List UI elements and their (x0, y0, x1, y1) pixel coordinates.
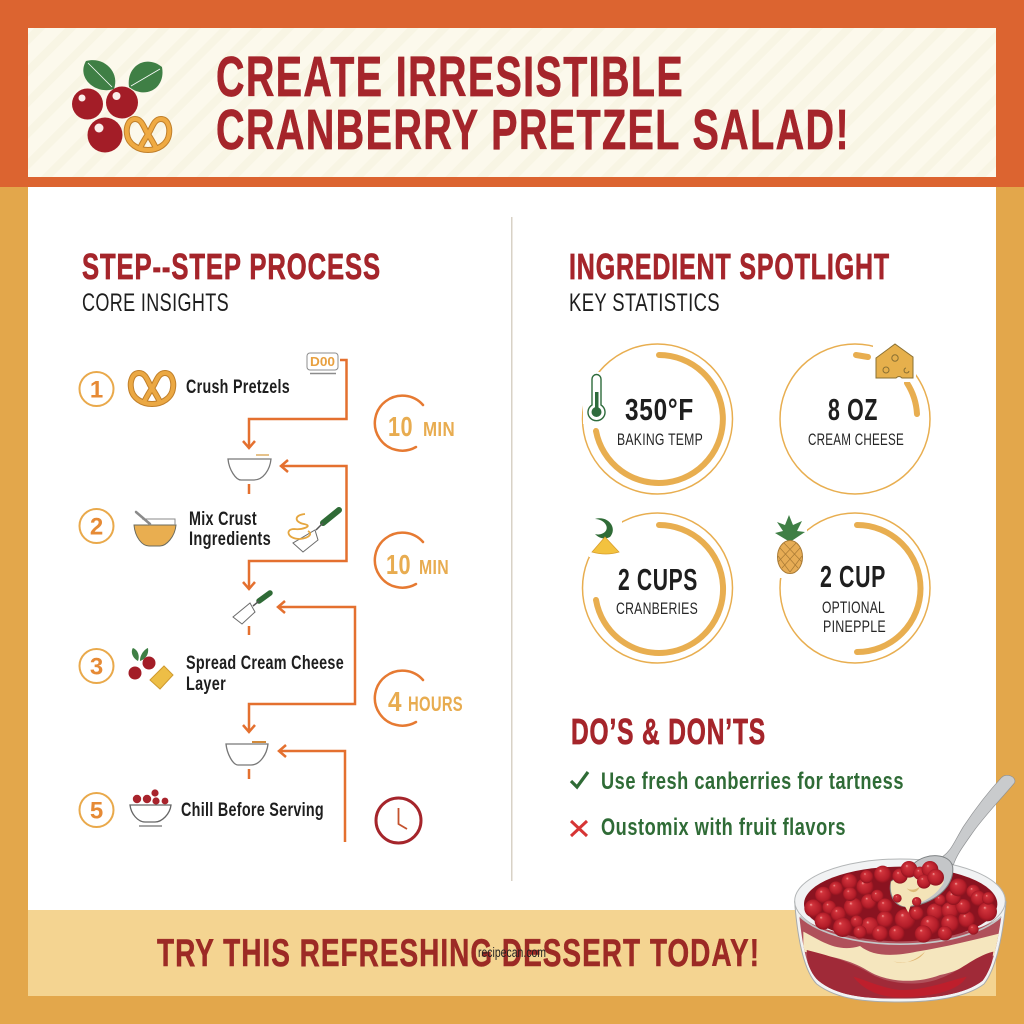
icon: clock (376, 798, 421, 843)
timer: 10 min (375, 396, 455, 451)
heading: ingredient spotlight: KEY STATISTICS (569, 289, 720, 317)
watermark: recipecan.com (478, 945, 546, 960)
step 3: spread cream cheese layer: Layer (186, 674, 226, 695)
heading: step process: CORE INSIGHTS (82, 289, 229, 317)
icon: mixing bowl (226, 742, 268, 765)
timer: 10 min (375, 533, 449, 588)
panel: step-by-step process (80, 246, 463, 843)
icon: thermometer (583, 372, 609, 424)
stat: cream cheese (780, 342, 930, 494)
stat: baking temp (582, 344, 732, 494)
icon: check mark (571, 772, 588, 787)
stat: cranberries (582, 513, 732, 663)
icon: digital timer: D00 (310, 354, 335, 369)
icon: spatula with cream (288, 510, 339, 552)
timer: 10 min: MIN (419, 557, 449, 579)
title (216, 45, 850, 162)
icon: cheese wedge (873, 342, 916, 382)
step 3: spread cream cheese layer: Spread Cream Cheese (186, 653, 344, 674)
stat: cranberries: CRANBERIES (616, 600, 698, 618)
step 5: chill before serving: Chill Before Serving (181, 800, 324, 821)
illustration: cranberry dessert bowl with spoon (793, 775, 1015, 1003)
stat: cream cheese: CREAM CHEESE (808, 431, 904, 449)
timer: 4 hours: HOURS (408, 693, 463, 716)
icon: spatula (233, 593, 270, 624)
icon: cranberries and pretzel logo (72, 60, 169, 152)
icon: pretzel (131, 373, 173, 404)
heading: ingredient spotlight: INGREDIENT SPOTLIGHT (569, 246, 890, 287)
stat: baking temp: 350°F (625, 392, 694, 427)
step 2: mix crust ingredients: Mix Crust (189, 509, 257, 530)
header banner (28, 28, 996, 177)
stat: baking temp: BAKING TEMP (617, 431, 703, 449)
step 1: crush pretzels (80, 353, 338, 406)
cranberries (804, 866, 997, 943)
step 1: crush pretzels: 1 (90, 376, 103, 404)
step 2: mix crust ingredients: Ingredients (189, 529, 271, 550)
timer: 4 hours: 4 (388, 686, 402, 717)
stat: optional pineapple: OPTIONAL (822, 599, 885, 617)
icon: pineapple (773, 514, 807, 578)
stat: optional pineapple: 2 CUP (820, 559, 886, 594)
title: CREATE IRRESISTIBLE (216, 45, 684, 109)
panel: do's and don'ts: DO’S & DON’TS (571, 711, 766, 752)
footer band: TRY THIS REFRESHING DESSERT TODAY! (157, 932, 760, 975)
stat: optional pineapple: PINEPPLE (823, 618, 886, 636)
timer: 10 min: 10 (386, 549, 411, 580)
step 1: crush pretzels: Crush Pretzels (186, 377, 290, 398)
step 3: spread cream cheese layer (80, 648, 344, 695)
heading: ingredient spotlight (569, 246, 890, 317)
heading: step process: STEP--STEP PROCESS (82, 246, 381, 287)
panel: do's and don'ts: Oustomix with fruit flavors (601, 814, 846, 841)
icon: bowl of berries (130, 789, 171, 826)
stat: cranberries: 2 CUPS (618, 562, 698, 597)
footer band (28, 910, 996, 996)
stat: cream cheese: 8 OZ (828, 392, 878, 427)
step 5: chill before serving: 5 (90, 798, 103, 824)
icon: digital timer (307, 353, 338, 374)
spoon (890, 775, 1015, 913)
icon: mixing bowl (228, 455, 271, 480)
panel: do's and don'ts (571, 711, 904, 841)
icon: pineapple wedge (589, 515, 622, 557)
timer: 10 min: 10 (388, 411, 413, 442)
stat: optional pineapple (773, 513, 930, 663)
step 5: chill before serving (80, 789, 324, 827)
step 2: mix crust ingredients: 2 (90, 514, 103, 540)
icon: bowl with spoon (134, 512, 176, 546)
timer: 4 hours (375, 671, 463, 726)
step 3: spread cream cheese layer: 3 (90, 654, 103, 680)
icon: cross mark (571, 821, 587, 836)
icon: cranberries and cheese (128, 648, 173, 689)
timer: 10 min: MIN (423, 419, 455, 441)
panel: ingredient spotlight (569, 246, 930, 663)
heading: step process (82, 246, 381, 317)
flow arrows (243, 360, 355, 842)
glass bowl (793, 859, 1007, 1003)
divider (511, 217, 512, 881)
step 2: mix crust ingredients (80, 509, 339, 552)
panel: do's and don'ts: Use fresh canberries for tartness (601, 768, 904, 795)
